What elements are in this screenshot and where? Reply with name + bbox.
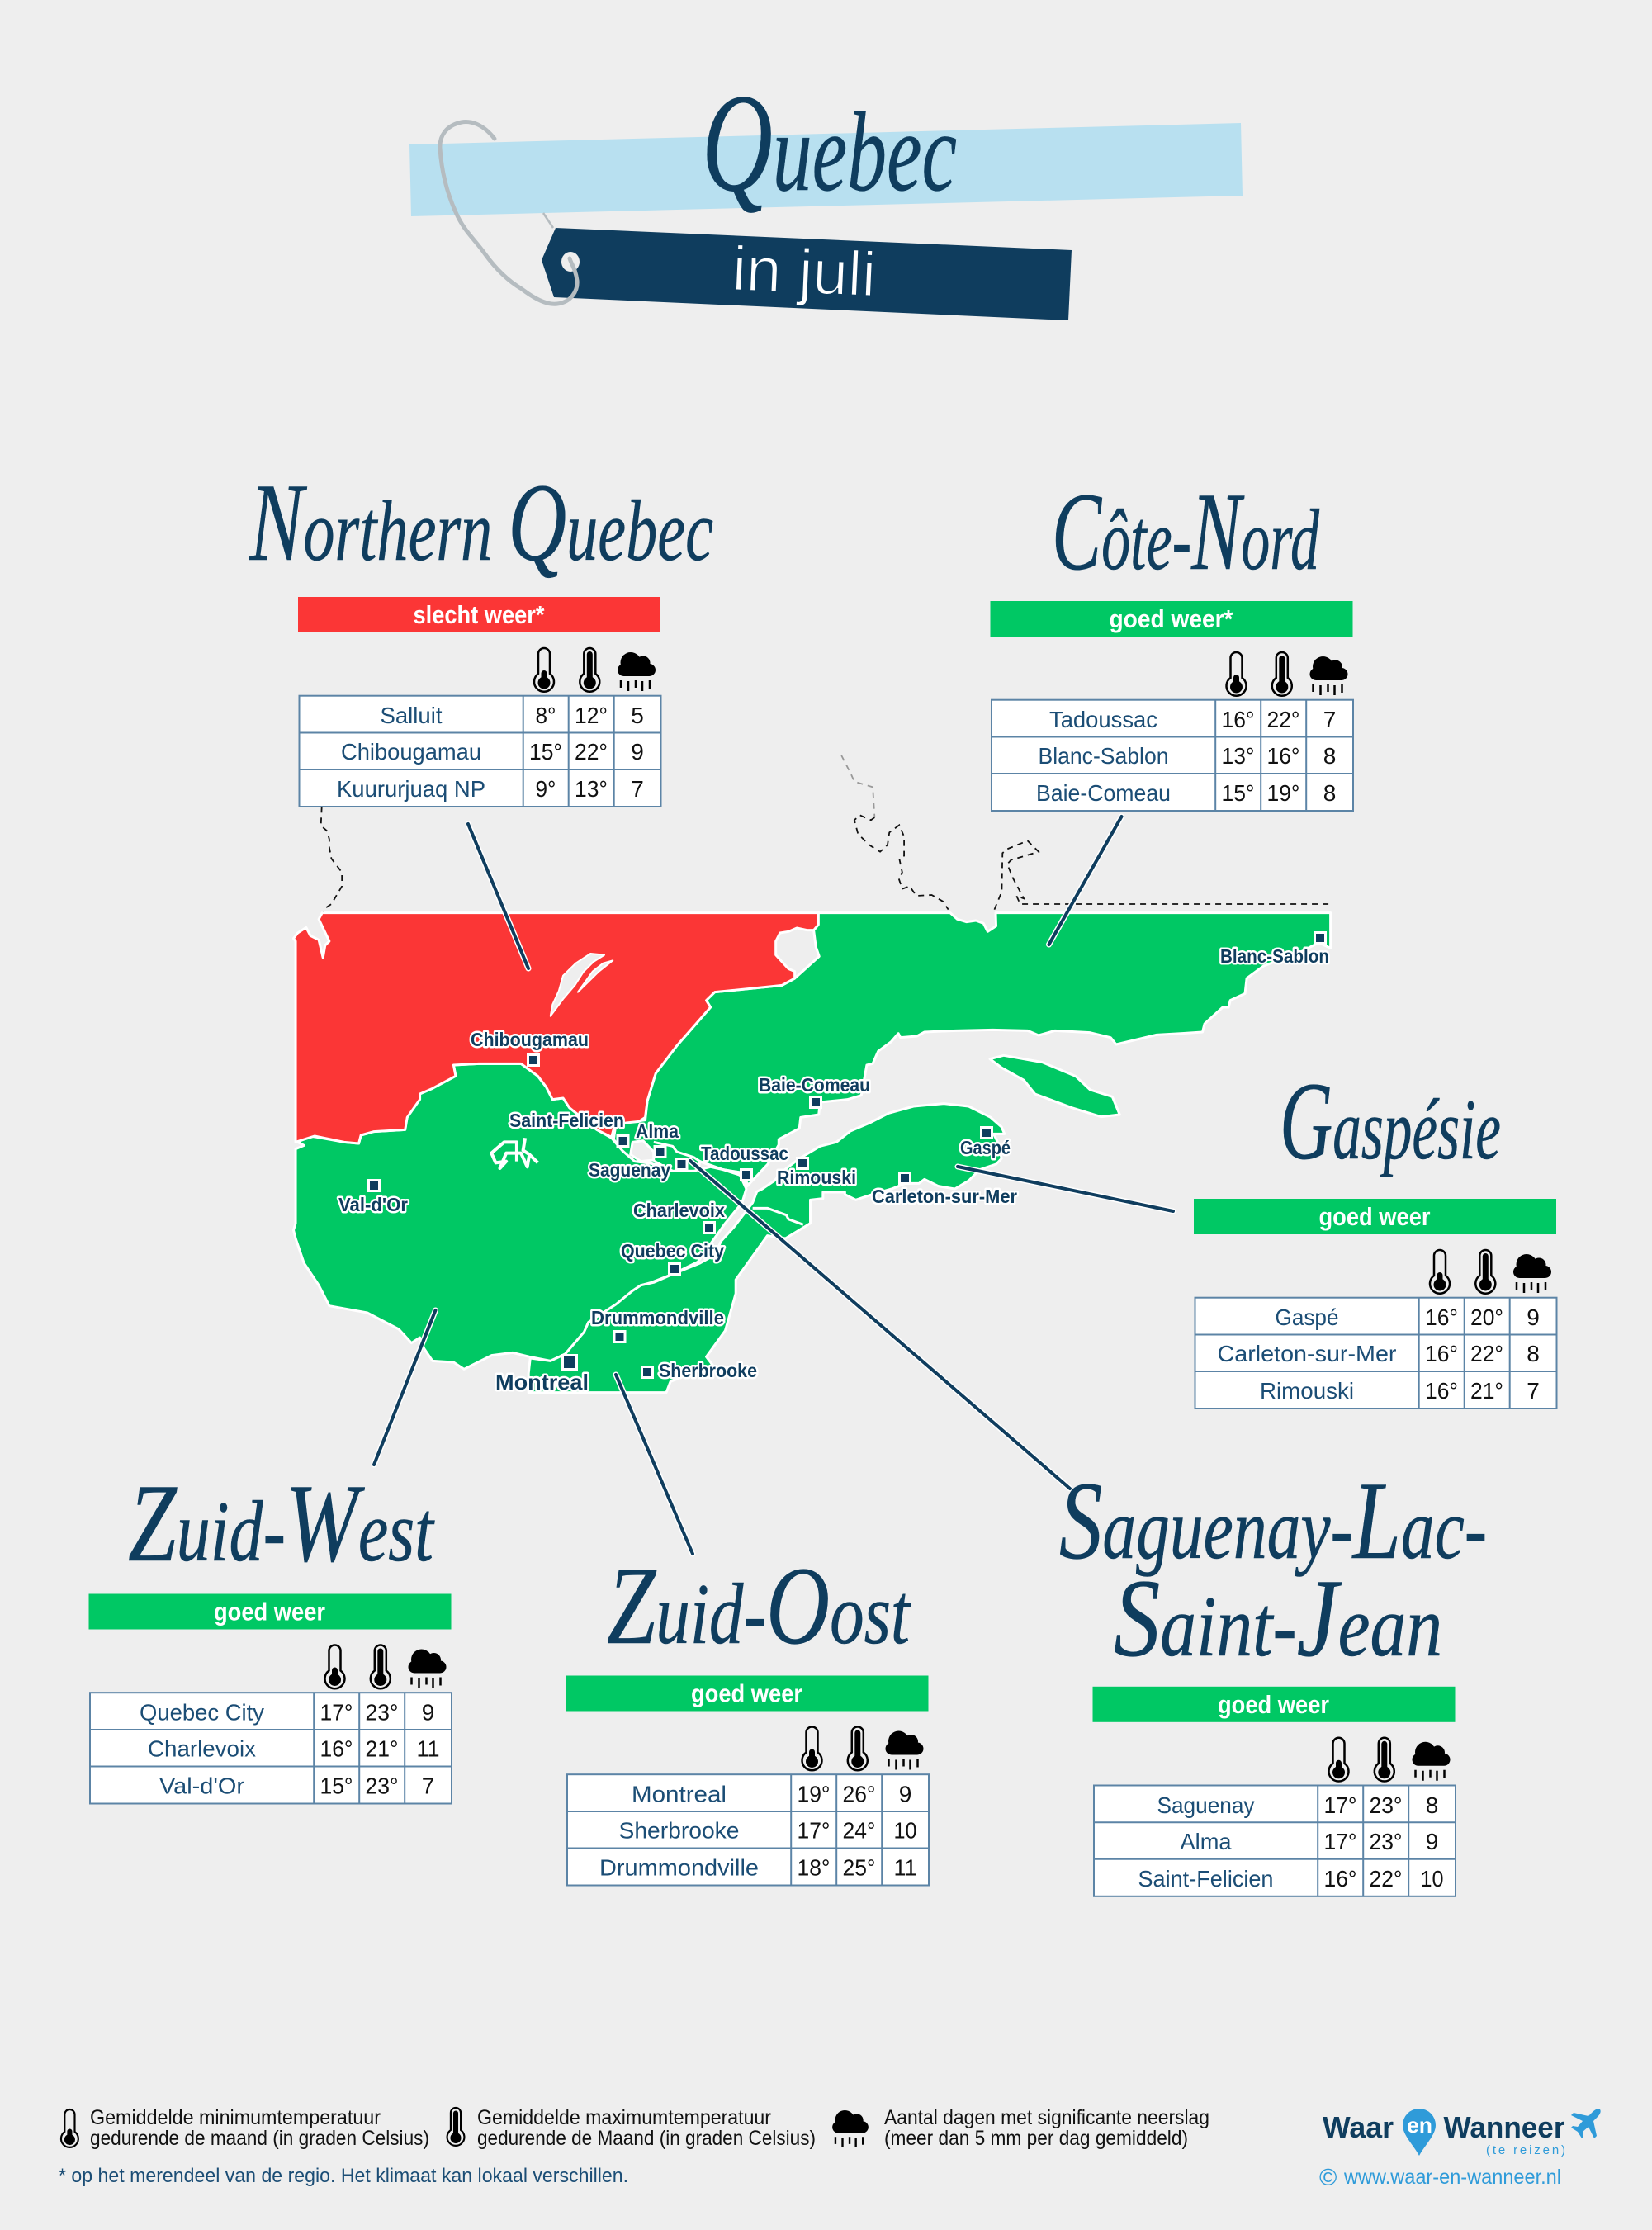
logo tagline: (te reizen) (1486, 2143, 1565, 2157)
climate table: 23° (365, 1773, 398, 1798)
climate table: 18° (798, 1854, 831, 1881)
climate table: Chibougamau (341, 739, 481, 765)
climate table: 16° (1266, 743, 1299, 769)
city markers (368, 933, 1326, 1377)
pointer: Gaspesie (958, 1167, 1173, 1211)
climate table: 8 (1527, 1341, 1540, 1366)
region: Zuid-Oost and Gaspesie (528, 1104, 1005, 1393)
region: Northern Quebec (294, 913, 818, 1143)
column icons (534, 648, 656, 692)
city labels: Carleton-sur-Mer (872, 1186, 1017, 1207)
city labels: Tadoussac (701, 1143, 788, 1164)
city labels: Charlevoix (633, 1200, 725, 1221)
weather banner (1194, 1199, 1556, 1234)
Anticosti island (990, 1055, 1119, 1117)
city labels: Rimouski (777, 1167, 856, 1188)
logo word Wanneer: Wanneer (1443, 2110, 1565, 2144)
weather banner (1093, 1687, 1455, 1722)
legend text: rain (884, 2106, 1209, 2150)
climate table (992, 700, 1353, 811)
climate table: 13° (1222, 743, 1255, 769)
weather banner: goed weer* (1110, 604, 1233, 633)
column icons (1430, 1250, 1551, 1294)
city labels: Gaspé (960, 1137, 1011, 1158)
climate table: Kuururjuaq NP (337, 776, 485, 802)
weather banner: goed weer (1218, 1690, 1329, 1719)
region boundary Gaspesie (753, 1208, 803, 1224)
climate table: 15° (1222, 780, 1255, 806)
city labels (338, 945, 1329, 1394)
weather banner (298, 597, 660, 632)
panel: Zuid-West (89, 1462, 452, 1803)
climate table: 24° (842, 1818, 875, 1843)
pointer: Saguenay (690, 1161, 1070, 1489)
heading: Zuid-Oost (607, 1545, 911, 1668)
climate table: 9 (1426, 1829, 1438, 1854)
climate table: 9 (899, 1782, 911, 1806)
legend text: max temperature: gedurende de Maand (in graden Celsius) (477, 2127, 816, 2150)
city labels: Saguenay (589, 1159, 670, 1181)
climate table: Quebec City (140, 1699, 264, 1726)
column icons (1227, 652, 1347, 696)
climate table: 7 (631, 776, 644, 802)
climate table: Alma (1181, 1829, 1232, 1854)
climate table (567, 1774, 929, 1886)
city labels: Saint-Felicien (509, 1110, 624, 1131)
dashed border left (321, 807, 342, 913)
climate table: 8° (535, 703, 556, 728)
climate table: 25° (842, 1854, 875, 1881)
heading: Côte-Nord (1052, 471, 1319, 594)
climate table: 7 (1323, 707, 1336, 732)
climate table: 16° (320, 1735, 353, 1762)
climate table: 22° (1369, 1866, 1402, 1891)
climate table: Carleton-sur-Mer (1217, 1341, 1397, 1366)
icon: max temperature (447, 2108, 464, 2146)
climate table: 11 (416, 1735, 439, 1762)
map (294, 755, 1331, 1554)
climate table: 16° (1425, 1378, 1458, 1404)
table block (1194, 1199, 1557, 1409)
pointer: Northern Quebec (468, 824, 528, 968)
legend text: min temperature (90, 2106, 429, 2150)
weather banner (89, 1593, 451, 1630)
climate table: 9 (631, 739, 644, 765)
climate table: 9° (535, 776, 556, 802)
copyright icon: © (1319, 2165, 1337, 2191)
table block (89, 1593, 452, 1803)
region boundary Saguenay (613, 1124, 749, 1185)
climate table (90, 1693, 452, 1803)
footnote: * op het merendeel van de regio. Het klimaat kan lokaal verschillen. (59, 2165, 628, 2187)
climate table: 17° (1324, 1829, 1357, 1854)
heading: Northern Quebec (249, 462, 713, 585)
logo word en: en (1407, 2113, 1432, 2138)
weather banner: slecht weer* (413, 600, 545, 629)
climate table: 22° (575, 739, 608, 765)
dashed border Labrador fading (841, 755, 874, 817)
climate table: Blanc-Sablon (1039, 743, 1169, 769)
city labels: Baie-Comeau (759, 1074, 870, 1096)
subtitle: in juli (731, 234, 878, 310)
climate table: 15° (320, 1773, 353, 1798)
climate table: 9 (422, 1699, 434, 1726)
climate table: 19° (1266, 780, 1299, 806)
table block (1093, 1687, 1456, 1896)
icon: plane (1571, 2109, 1601, 2138)
region: Zuid-West (294, 1063, 746, 1369)
climate table: 10 (1420, 1866, 1443, 1891)
climate table: 16° (1425, 1341, 1458, 1366)
tag string short segment (543, 213, 553, 228)
climate table: 8 (1323, 780, 1336, 806)
weather banner: goed weer (691, 1679, 802, 1707)
climate table: 21° (1470, 1378, 1503, 1404)
legend text: max temperature: Gemiddelde maximumtemperatuur (477, 2106, 771, 2129)
pointer: Zuid-West (374, 1310, 436, 1465)
main title: Quebec (702, 65, 957, 220)
city labels: Drummondville (591, 1307, 724, 1328)
climate table: 9 (1527, 1304, 1540, 1330)
climate table: Saguenay (1157, 1792, 1255, 1818)
logo (1319, 2109, 1601, 2191)
climate table: 8 (1426, 1792, 1438, 1818)
climate table (1195, 1298, 1557, 1409)
climate table: 22° (1470, 1341, 1503, 1366)
climate table: 16° (1324, 1866, 1357, 1891)
climate table: 17° (1324, 1792, 1357, 1818)
light blue band (409, 123, 1243, 216)
city labels: Val-d'Or (338, 1194, 408, 1215)
pointer: Zuid-Oost (616, 1375, 693, 1554)
climate table: 15° (529, 739, 562, 765)
city labels: Quebec City (621, 1240, 724, 1262)
Lac Saint-Jean (631, 1141, 654, 1162)
climate table: Salluit (380, 703, 443, 728)
heading: Zuid-West (128, 1462, 435, 1585)
climate table: 8 (1323, 743, 1336, 769)
climate table: Sherbrooke (619, 1818, 740, 1843)
climate table: Saint-Felicien (1138, 1866, 1273, 1891)
panel: Northern Quebec (249, 462, 713, 807)
panel: Gaspesie (1194, 1060, 1557, 1409)
heading: Saguenay-Lac- (1059, 1460, 1487, 1583)
logo pin (1403, 2109, 1436, 2156)
table block (991, 601, 1353, 811)
legend text: max temperature (477, 2106, 816, 2150)
climate table: 13° (575, 776, 608, 802)
heading: Saint-Jean (1114, 1557, 1442, 1680)
column icons (325, 1645, 446, 1688)
climate table: Tadoussac (1049, 707, 1157, 732)
climate table: 23° (1369, 1829, 1402, 1854)
tag ring (440, 122, 577, 304)
climate table: 7 (422, 1773, 434, 1798)
city labels: Alma (636, 1120, 679, 1142)
climate table: Drummondville (599, 1854, 759, 1881)
weather banner: goed weer (214, 1597, 325, 1626)
legend (59, 2106, 1209, 2187)
climate table (1094, 1785, 1456, 1896)
city labels: Chibougamau (471, 1029, 589, 1050)
dark tag (542, 228, 1072, 320)
climate table: Val-d'Or (159, 1773, 244, 1798)
climate table: 16° (1425, 1304, 1458, 1330)
weather banner (566, 1676, 928, 1711)
weather banner (991, 601, 1352, 637)
climate table: 20° (1470, 1304, 1503, 1330)
dashed border Labrador (854, 815, 949, 910)
lake Mistassini (551, 954, 604, 1016)
climate table: Gaspé (1275, 1304, 1339, 1330)
climate table (299, 696, 660, 807)
climate table: Montreal (632, 1782, 727, 1806)
city labels: Sherbrooke (659, 1360, 757, 1381)
website: www.waar-en-wanneer.nl (1343, 2166, 1561, 2189)
icon: min temperature (61, 2109, 78, 2147)
title tag (409, 65, 1243, 320)
climate table: 10 (893, 1818, 916, 1843)
climate table: 21° (365, 1735, 398, 1762)
column icons (1329, 1738, 1450, 1782)
table block (566, 1676, 929, 1886)
climate table: 23° (365, 1699, 398, 1726)
icon: rain cloud (832, 2110, 869, 2147)
city labels: Montreal (495, 1370, 589, 1394)
heading (1059, 1460, 1487, 1680)
weather banner: goed weer (1319, 1202, 1430, 1231)
climate table: 17° (320, 1699, 353, 1726)
climate table: 23° (1369, 1792, 1402, 1818)
column icons (802, 1727, 923, 1770)
legend text: rain: (meer dan 5 mm per dag gemiddeld) (884, 2127, 1188, 2150)
climate table: Charlevoix (148, 1735, 256, 1762)
panel: Saguenay-Lac-Saint-Jean (1059, 1460, 1487, 1896)
climate table: 16° (1222, 707, 1255, 732)
tag hole (561, 252, 580, 272)
climate table: Baie-Comeau (1036, 780, 1171, 806)
panel: Zuid-Oost (566, 1545, 929, 1886)
climate table: 11 (893, 1854, 916, 1881)
dashed border east (994, 840, 1331, 910)
Gouin reservoir (491, 1138, 537, 1168)
climate table: 19° (798, 1782, 831, 1806)
panel: Cote-Nord (991, 471, 1353, 811)
pointer: Cote-Nord (1048, 817, 1121, 945)
climate table: 7 (1527, 1378, 1540, 1404)
city labels: Blanc-Sablon (1220, 945, 1329, 967)
climate table: Rimouski (1260, 1378, 1354, 1404)
region: Cote-Nord (613, 913, 1331, 1186)
climate table: 5 (631, 703, 644, 728)
legend text: min temperature: gedurende de maand (in graden Celsius) (90, 2127, 429, 2150)
climate table: 26° (842, 1782, 875, 1806)
climate table: 17° (798, 1818, 831, 1843)
logo word Waar: Waar (1323, 2110, 1394, 2144)
legend text: min temperature: Gemiddelde minimumtemperatuur (90, 2106, 381, 2129)
climate table: 12° (575, 703, 608, 728)
climate table: 22° (1266, 707, 1299, 732)
lake Mistassini east (578, 960, 613, 992)
legend text: rain: Aantal dagen met significante neerslag (884, 2106, 1209, 2129)
heading: Gaspésie (1280, 1060, 1501, 1183)
